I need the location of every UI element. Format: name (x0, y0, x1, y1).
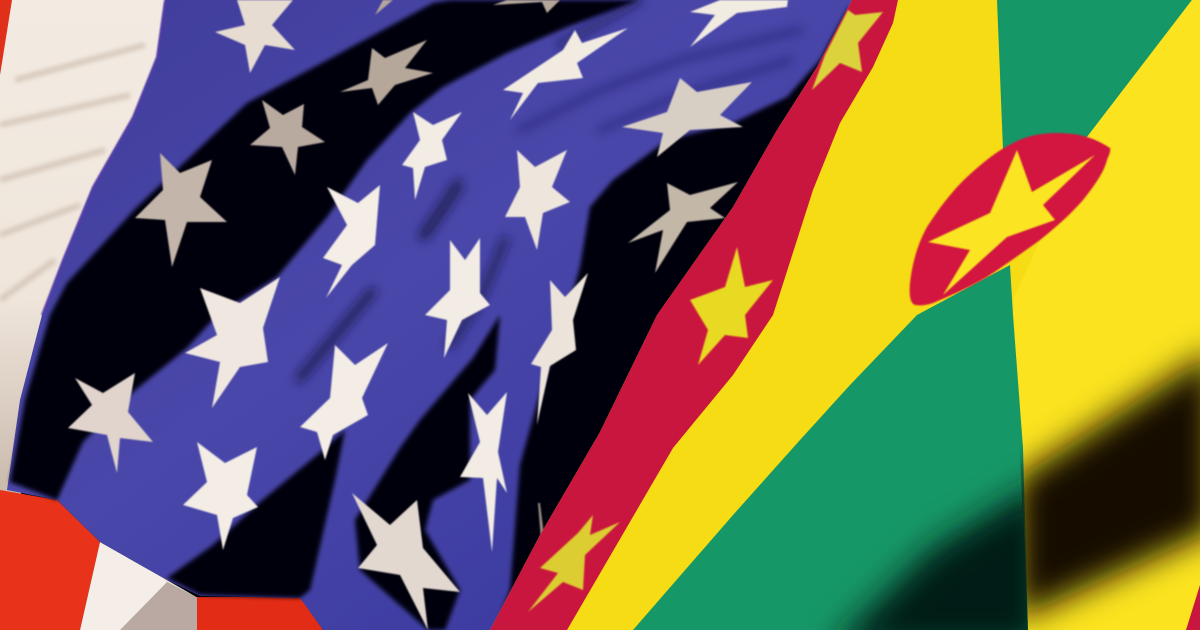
border star top (812, 10, 883, 90)
shadow on green (830, 480, 1045, 630)
thin fold streaks (300, 0, 800, 378)
white stripe lower left (80, 542, 198, 630)
shadow on yellow (1015, 350, 1200, 630)
white stripe upper left (0, 0, 175, 500)
US flag stripes (0, 0, 520, 630)
bottom green field (633, 265, 1028, 630)
red stripe bottom (197, 597, 323, 630)
red emblem (910, 133, 1110, 305)
border star middle (690, 247, 773, 365)
red stripe lower left (0, 490, 100, 630)
red corner upper left (0, 0, 12, 75)
stripe creases (0, 45, 145, 300)
Grenada flag (480, 0, 1200, 630)
US flag blue canton with dark folds (7, 0, 860, 630)
right yellow field (1013, 0, 1200, 630)
emblem star (928, 150, 1095, 295)
canton seam (42, 0, 165, 315)
shaded stripe (120, 582, 198, 630)
US flag stars (68, 0, 788, 630)
yellow base field (480, 0, 1200, 630)
red border band (480, 0, 898, 630)
dark folds (10, 0, 850, 630)
top green field (997, 0, 1192, 150)
border star bottom (528, 515, 620, 612)
